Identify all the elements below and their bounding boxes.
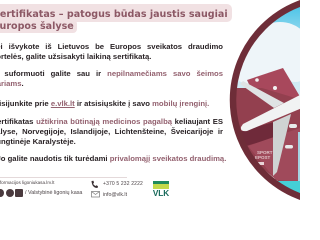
paragraph: compulsory insurance: Jo galite naudotis tik turėdami privalomąjį sveikatos draudimą. — [0, 154, 226, 163]
passport lettering — [255, 150, 273, 165]
passport lettering: SPORT — [257, 150, 273, 155]
title background — [0, 4, 232, 22]
circle ring — [233, 0, 320, 203]
paragraph: family members — [0, 69, 223, 88]
title — [0, 9, 228, 32]
image: plane and passports in circle — [230, 0, 300, 200]
paragraph: travel without card — [0, 42, 223, 61]
title: Sertifikatas – patogus būdas jaustis saugiai — [0, 9, 228, 20]
footer: social icons — [0, 189, 23, 197]
icon: envelope — [91, 191, 100, 198]
passport lettering: EPOST — [255, 155, 271, 160]
footer: phone number: +370 5 232 2222 — [103, 181, 143, 187]
footer divider — [0, 176, 127, 178]
icon: phone — [92, 180, 98, 188]
footer: email: info@vlk.lt — [103, 192, 127, 198]
logo: VLK — [153, 181, 169, 198]
lower passports — [236, 88, 300, 181]
clouds — [238, 22, 300, 84]
teal background bottom — [278, 181, 300, 193]
airplane — [240, 78, 302, 176]
logo: VLK: VLK — [153, 188, 169, 198]
sky — [237, 7, 300, 96]
paragraph: coverage — [0, 117, 223, 146]
upper passport — [247, 68, 300, 98]
footer: social handle: / Valstybinė ligonių kasa — [25, 190, 82, 196]
